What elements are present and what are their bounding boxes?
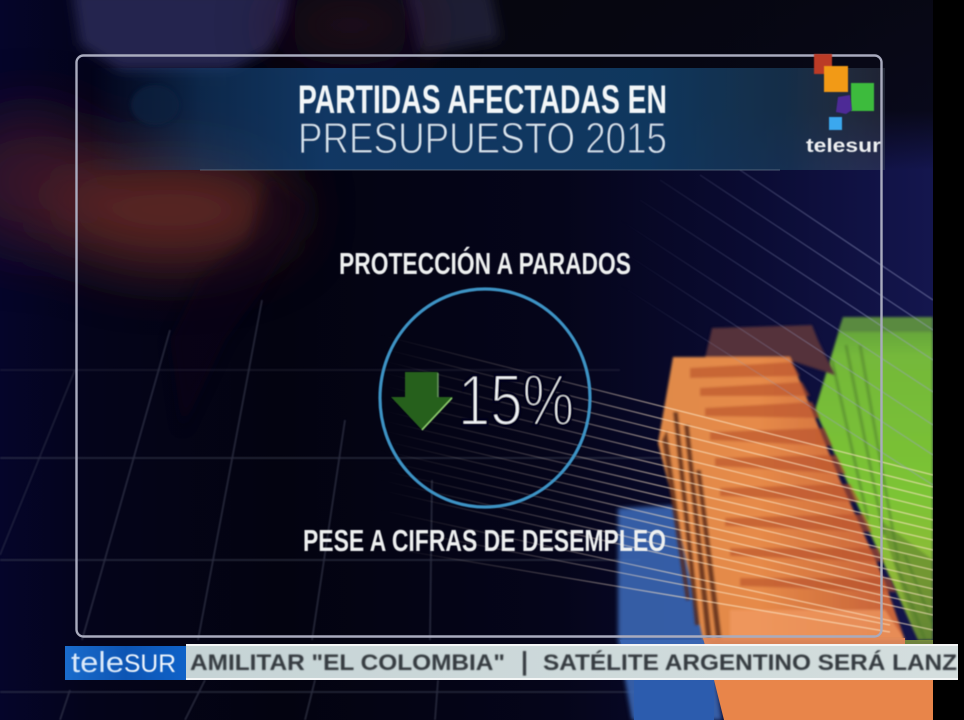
title: PARTIDAS AFECTADAS EN	[298, 78, 667, 122]
title: PRESUPUESTO 2015	[298, 114, 667, 163]
title	[298, 78, 667, 163]
red glow	[0, 3, 425, 265]
lower orange and blue strip	[634, 680, 714, 720]
percentage: 15%	[458, 361, 574, 441]
ticker logo: SUR	[124, 650, 176, 678]
chart blocks: orange	[658, 325, 905, 640]
ticker logo	[65, 646, 186, 680]
news ticker	[65, 644, 958, 680]
frame panel	[76, 56, 882, 636]
ticker text: AMILITAR "EL COLOMBIA"	[190, 650, 505, 675]
caption: PESE A CIFRAS DE DESEMPLEO	[303, 523, 666, 558]
subheading: PROTECCIÓN A PARADOS	[339, 245, 631, 281]
ticker text: |	[521, 646, 528, 676]
header banner	[90, 68, 885, 171]
ticker text: SATÉLITE ARGENTINO SERÁ LANZ	[543, 650, 957, 675]
world map silhouettes	[72, 0, 500, 70]
telesur logo	[806, 54, 882, 157]
south america silhouette	[209, 181, 292, 273]
ticker logo: tele	[71, 647, 124, 679]
icon: down arrow	[391, 372, 453, 430]
chart blocks: green	[815, 317, 933, 640]
ticker text	[190, 646, 957, 676]
telesur logo: telesur	[806, 136, 882, 157]
blue block	[618, 505, 722, 720]
perspective grid	[0, 300, 662, 720]
light rays	[380, 335, 933, 632]
circle	[380, 289, 590, 507]
